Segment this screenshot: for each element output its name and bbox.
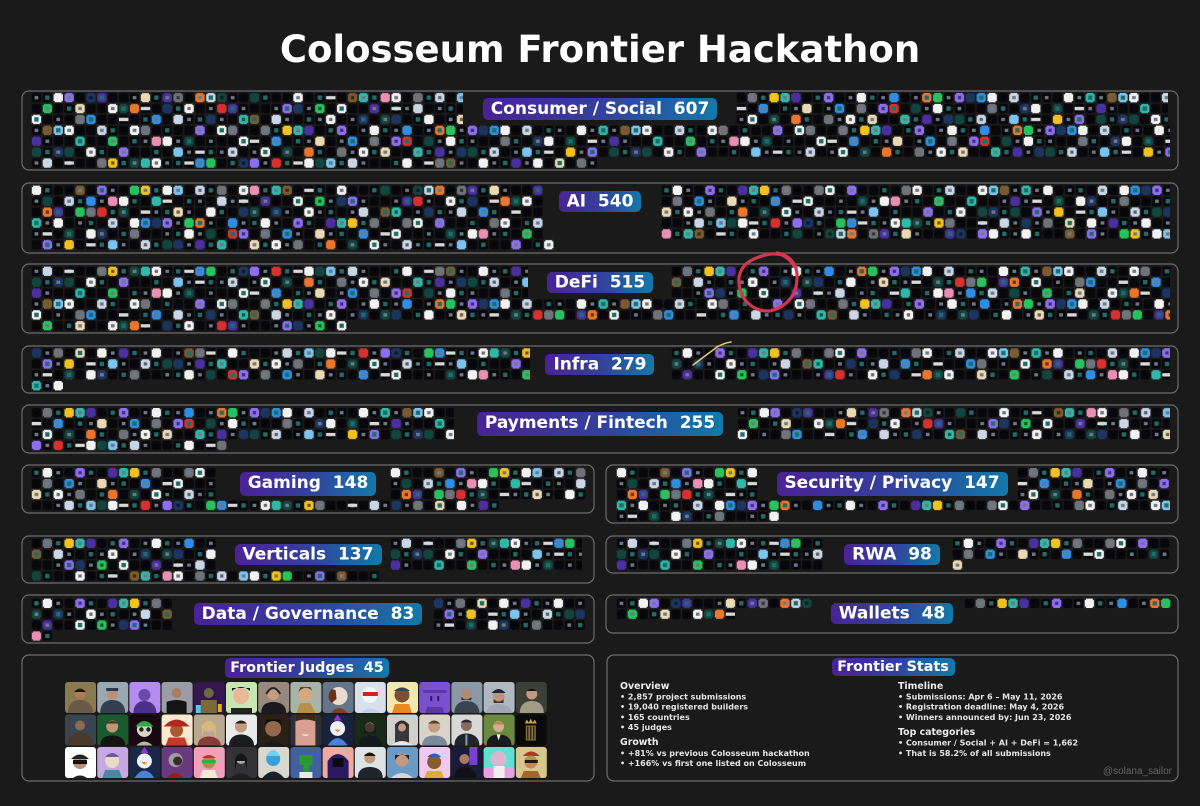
- panel: Security / Privacy: [606, 465, 1178, 523]
- label: DeFi 515: DeFi 515: [555, 272, 645, 292]
- text block: growth: • +81% vs previous Colosseum hackathon: [620, 749, 810, 758]
- label: Consumer / Social 607: Consumer / Social 607: [491, 99, 709, 119]
- label: Payments / Fintech 255: Payments / Fintech 255: [485, 413, 715, 433]
- text block: timeline: • Winners announced by: Jun 23, 2026: [898, 713, 1072, 722]
- logo tiles: Data left: [31, 598, 173, 641]
- logo tiles: Data right: [433, 598, 585, 631]
- label: Frontier Judges 45: Frontier Judges 45: [230, 660, 384, 676]
- logo tiles: Verticals left: [31, 538, 380, 581]
- label: AI 540: AI 540: [567, 192, 634, 212]
- label: Gaming 148: Gaming 148: [248, 473, 368, 493]
- logo tiles: Infra left: [31, 348, 530, 391]
- logo tiles: Verticals right: [390, 538, 582, 571]
- logo tiles: Consumer / Social left and lower rows: [31, 92, 1170, 168]
- panel: Consumer / Social: [22, 91, 1178, 170]
- panel: RWA: [606, 536, 1178, 573]
- logo tiles: DeFi right: [671, 266, 1170, 299]
- label: Infra 279: Infra 279: [553, 354, 647, 374]
- text block: timeline: • Registration deadline: May 4, 2026: [898, 702, 1064, 712]
- logo tiles: Wallets left: [616, 598, 812, 620]
- text block: growth: [620, 737, 810, 768]
- label: RWA 98: RWA 98: [852, 544, 932, 564]
- judge avatars: row 2: [65, 714, 547, 746]
- label: Verticals 137: Verticals 137: [243, 544, 373, 564]
- judge avatars: row 3: [65, 747, 547, 778]
- label: Security / Privacy 147: Security / Privacy 147: [784, 473, 1000, 493]
- logo tiles: Wallets right: [964, 598, 1171, 609]
- label: Data / Governance 83: Data / Governance 83: [202, 604, 414, 624]
- text block: top categories: • That is 58.2% of all submissions: [898, 749, 1051, 758]
- text block: timeline: [898, 681, 1072, 722]
- panel: Frontier Stats: [607, 655, 1178, 781]
- logo tiles: Consumer / Social right: [736, 92, 1168, 125]
- text block: top categories: • Consumer / Social + AI + DeFi = 1,662: [898, 738, 1078, 748]
- panel: DeFi: [22, 253, 1178, 333]
- logo tiles: Security left and lower rows: [616, 467, 1170, 522]
- logo tiles: RWA right: [952, 538, 1170, 571]
- panel: Verticals: [22, 536, 594, 583]
- text block: overview: • 165 countries: [620, 713, 690, 722]
- label: Wallets 48: Wallets 48: [839, 604, 945, 624]
- annotation: yellow pen stroke: [693, 342, 731, 365]
- title: Colosseum Frontier Hackathon: [280, 28, 920, 71]
- label: Frontier Stats: Frontier Stats: [837, 659, 949, 675]
- panel: AI: [22, 183, 1178, 253]
- panel: Wallets: [606, 595, 1178, 633]
- logo tiles: Security right: [1017, 467, 1170, 500]
- text block: top categories: [898, 727, 1078, 758]
- text block: timeline: Timeline: [898, 681, 943, 692]
- logo tiles: Payments left: [31, 407, 454, 451]
- text block: growth: Growth: [620, 737, 659, 748]
- panel: Payments / Fintech: [22, 405, 1178, 453]
- text block: overview: • 2,857 project submissions: [620, 692, 746, 702]
- logo tiles: AI left: [31, 185, 554, 250]
- judge avatars: row 1: [65, 682, 547, 713]
- panel: Infra: [22, 342, 1178, 393]
- logo tiles: Infra right: [671, 348, 1170, 380]
- text block: top categories: Top categories: [898, 727, 976, 738]
- annotation: red hand-drawn circle: [739, 253, 797, 311]
- logo tiles: RWA left: [616, 538, 823, 571]
- logo tiles: Gaming right: [390, 467, 586, 500]
- logo tiles: Payments right: [737, 407, 1170, 440]
- panel: Frontier Judges: [22, 655, 594, 781]
- logo tiles: AI right: [661, 185, 1170, 239]
- watermark: @solana_sailor: [1103, 766, 1173, 777]
- text block: growth: • +166% vs first one listed on Colosseum: [620, 759, 806, 768]
- text block: overview: • 45 judges: [620, 723, 672, 732]
- text block: overview: [620, 681, 748, 732]
- text block: timeline: • Submissions: Apr 6 – May 11, 2026: [898, 692, 1063, 702]
- logo tiles: Gaming left: [31, 467, 500, 511]
- panel: Gaming: [22, 465, 594, 513]
- logo tiles: DeFi left and lower rows: [31, 266, 1170, 331]
- text block: overview: Overview: [620, 681, 670, 692]
- text block: overview: • 19,040 registered builders: [620, 702, 748, 712]
- panel: Data / Governance: [22, 595, 594, 643]
